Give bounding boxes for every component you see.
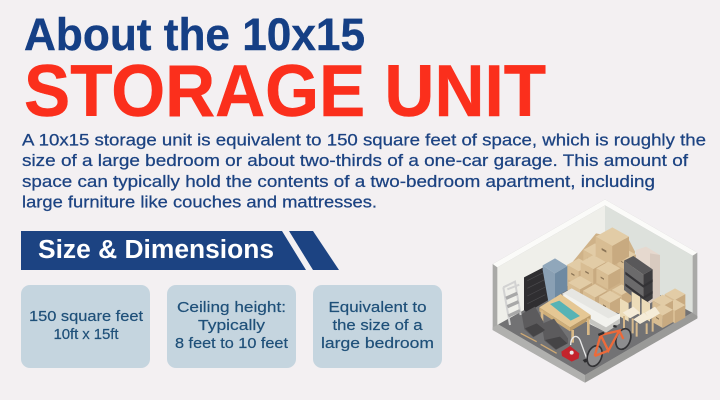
section banner: Size & Dimensions: Size & Dimensions [38, 236, 274, 264]
section banner: Size & Dimensions [21, 231, 339, 270]
card: equivalent size: Equivalent to [328, 299, 426, 316]
card: square feet: 150 square feet [29, 308, 144, 325]
intro text block [22, 132, 706, 212]
wardrobe [636, 247, 660, 303]
card: equivalent size: large bedroom [321, 335, 434, 352]
card: ceiling height: 8 feet to 10 feet [175, 335, 289, 352]
intro text block: large furniture like couches and mattresses. [22, 194, 377, 212]
office chairs [521, 307, 568, 353]
black filing cabinet [524, 267, 548, 313]
intro text block: A 10x15 storage unit is equivalent to 150 square feet of space, which is roughly the [22, 132, 706, 150]
title: About the 10x15: About the 10x15 [24, 9, 365, 60]
card: ceiling height [167, 285, 296, 368]
intro text block: size of a large bedroom or about two-thirds of a one-car garage. This amount of [22, 152, 689, 170]
blue cabinet [543, 258, 567, 302]
card: equivalent size: the size of a [332, 317, 423, 334]
card: square feet [21, 285, 150, 368]
title: STORAGE UNIT: STORAGE UNIT [24, 51, 546, 132]
dining chairs [620, 292, 660, 337]
right box stacks [652, 288, 685, 328]
step ladder [503, 282, 521, 325]
card: equivalent size [313, 285, 442, 368]
intro text block: space can typically hold the contents of a two-bedroom apartment, including [22, 173, 655, 191]
card: square feet: 10ft x 15ft [54, 326, 119, 343]
wooden table [539, 294, 591, 343]
room shell [493, 199, 697, 383]
vacuum cleaner [561, 336, 589, 363]
metal shelving [624, 256, 653, 305]
card: ceiling height: Ceiling height: [177, 299, 286, 316]
illustration: isometric storage room [493, 199, 697, 383]
stacked boxes [567, 227, 636, 316]
card: ceiling height: Typically [198, 317, 266, 334]
couch [558, 288, 620, 333]
bicycle [584, 326, 634, 368]
